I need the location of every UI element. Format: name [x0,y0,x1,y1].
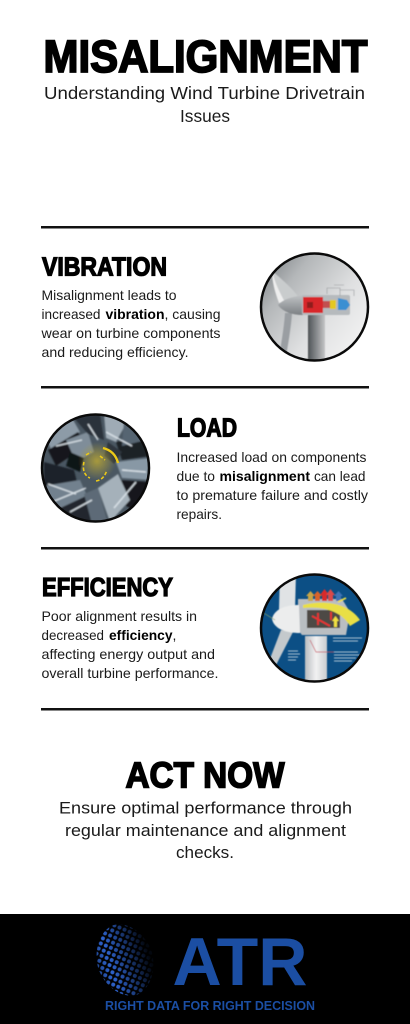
tagline: RIGHT DATA FOR RIGHT DECISION [105,999,315,1013]
subtitle [44,83,365,126]
title: MISALIGNMENT [44,31,368,82]
text block: efficiency: overall turbine performance. [42,665,218,681]
subtitle: Issues [180,106,230,126]
text block: load: misalignment [220,468,310,484]
text block: efficiency: decreased [42,627,104,643]
panel: efficiency [42,572,370,686]
text block: efficiency: affecting energy output and [42,646,215,662]
icon: dotted globe logo [96,924,154,996]
text block: call to action: Ensure optimal performance through [59,798,352,818]
text block: call to action: regular maintenance and alignment [65,821,346,840]
text block: vibration: and reducing efficiency. [42,344,188,360]
text block: load [176,449,368,522]
icon: turbine nacelle cutaway [260,252,370,364]
text block: efficiency: , [172,627,176,643]
text block: vibration: wear on turbine components [40,325,220,341]
text block: efficiency: efficiency [109,627,173,643]
footer band [0,914,410,1024]
text block: load: repairs. [176,506,222,522]
heading: vibration: VIBRATION [42,252,167,282]
text block: vibration: increased [42,306,100,322]
text block: vibration [40,287,221,360]
logo wordmark: ATR [172,924,308,1000]
icon: turbine diagram [260,572,370,686]
text block: vibration: vibration [106,306,164,322]
text block: load: Increased load on components [176,449,366,465]
text block: efficiency [42,608,218,681]
subtitle: Understanding Wind Turbine Drivetrain [44,83,365,103]
text block: efficiency: Poor alignment results in [42,608,197,624]
icon: gearbox [40,412,152,526]
text block: load: can lead [314,468,366,484]
panel: load [40,412,368,526]
heading: load: LOAD [177,412,237,442]
heading: efficiency: EFFICIENCY [42,572,173,602]
text block: vibration: Misalignment leads to [42,287,177,303]
text block: load: due to [176,468,215,484]
text block: call to action: checks. [176,843,234,862]
text block: load: to premature failure and costly [176,487,368,503]
panel: vibration [40,252,370,364]
text block: vibration: , causing [164,306,220,322]
text block: call to action [59,798,352,862]
heading: act now: ACT NOW [126,754,285,796]
